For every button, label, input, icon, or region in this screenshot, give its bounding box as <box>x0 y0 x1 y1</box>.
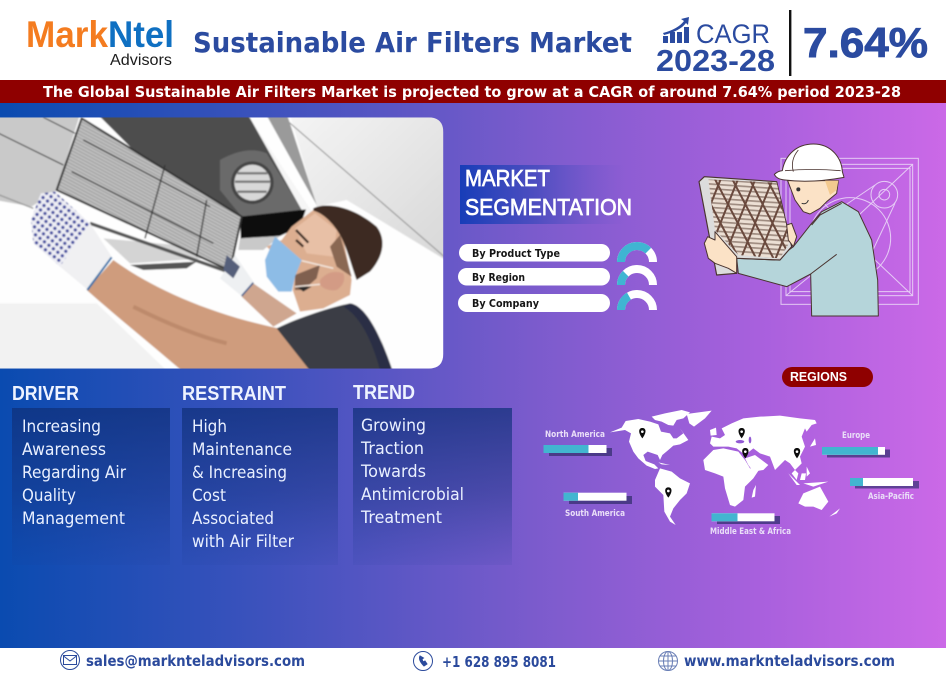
phone number: +1 628 895 8081 <box>442 653 556 671</box>
map: greenland <box>687 411 712 427</box>
icon: phone <box>414 652 432 670</box>
trend box <box>353 408 512 565</box>
driver text: Regarding Air <box>22 463 126 483</box>
email address: sales@marknteladvisors.com <box>86 652 305 670</box>
icon: globe <box>658 652 678 670</box>
driver text: Increasing <box>22 417 101 437</box>
region bar: europe <box>822 431 890 458</box>
trend text <box>360 416 464 528</box>
trend text: Traction <box>360 439 424 459</box>
segment: by region: By Region <box>472 271 525 284</box>
region bar: north america <box>544 430 612 456</box>
world map <box>610 410 840 525</box>
region bar: north america: North America <box>545 430 605 440</box>
region bar: europe: Europe <box>842 431 870 441</box>
restraint box <box>182 408 338 565</box>
website: www.marknteladvisors.com <box>684 652 895 670</box>
restraint text <box>192 417 294 552</box>
regions label: REGIONS <box>790 369 847 384</box>
restraint text: & Increasing <box>192 463 287 483</box>
trend text: Towards <box>360 462 426 482</box>
icon: email <box>60 650 80 670</box>
map pins <box>639 428 800 498</box>
logo: MarkNtel Advisors: Mark <box>26 14 108 55</box>
map: eurasia africa oceania <box>703 416 840 517</box>
restraint text: Associated <box>192 509 274 529</box>
market segmentation heading: MARKET <box>465 165 550 191</box>
region bar: south america: South America <box>565 509 625 519</box>
driver text: Quality <box>22 486 76 506</box>
driver box <box>12 408 170 565</box>
driver text: Awareness <box>22 440 106 460</box>
driver text <box>22 417 126 529</box>
logo: MarkNtel Advisors <box>26 14 174 69</box>
market segmentation heading <box>460 165 632 224</box>
restraint heading: RESTRAINT <box>182 383 286 405</box>
logo: MarkNtel Advisors: Advisors <box>110 52 172 69</box>
regions label <box>782 367 873 387</box>
trend heading: TREND <box>353 382 415 404</box>
trend text: Antimicrobial <box>361 485 464 505</box>
divider <box>789 10 791 76</box>
restraint text: Maintenance <box>192 440 292 460</box>
segment: by region <box>458 268 653 286</box>
header band <box>0 0 946 80</box>
footer band <box>0 648 946 674</box>
restraint text: Cost <box>192 486 226 506</box>
map: americas <box>610 410 690 525</box>
region bar: south america <box>564 493 632 519</box>
restraint text: with Air Filter <box>192 532 294 552</box>
trend text: Growing <box>361 416 426 436</box>
region bar: middle east and africa <box>710 513 791 537</box>
panel: driver <box>12 383 170 565</box>
restraint text: High <box>192 417 227 437</box>
segment: by company: By Company <box>472 297 539 310</box>
red summary bar: The Global Sustainable Air Filters Market is projected to grow at a CAGR of around 7.64% period 2023-28 <box>43 83 901 101</box>
region bar: asia-pacific: Asia-Pacific <box>868 492 914 502</box>
CAGR period: 2023-28 <box>656 43 775 78</box>
photo: technician replacing air filter <box>0 117 444 369</box>
region bar: asia-pacific <box>850 478 919 502</box>
segment: by product type <box>459 244 653 262</box>
segment: by company <box>458 294 653 312</box>
icon: rising bar chart <box>663 17 689 43</box>
market segmentation heading: SEGMENTATION <box>465 194 632 220</box>
driver text: Management <box>22 509 125 529</box>
trend text: Treatment <box>360 508 442 528</box>
panel: trend <box>353 382 512 565</box>
title: Sustainable Air Filters Market <box>193 27 632 59</box>
CAGR value: 7.64% <box>803 19 928 66</box>
logo: MarkNtel Advisors: Ntel <box>108 14 174 55</box>
region bar: middle east and africa: Middle East & Africa <box>710 527 791 537</box>
driver heading: DRIVER <box>12 383 79 405</box>
segment: by product type: By Product Type <box>472 247 560 260</box>
CAGR label: CAGR <box>696 19 770 49</box>
illustration: worker holding air filter <box>698 144 919 316</box>
panel: restraint <box>182 383 338 565</box>
